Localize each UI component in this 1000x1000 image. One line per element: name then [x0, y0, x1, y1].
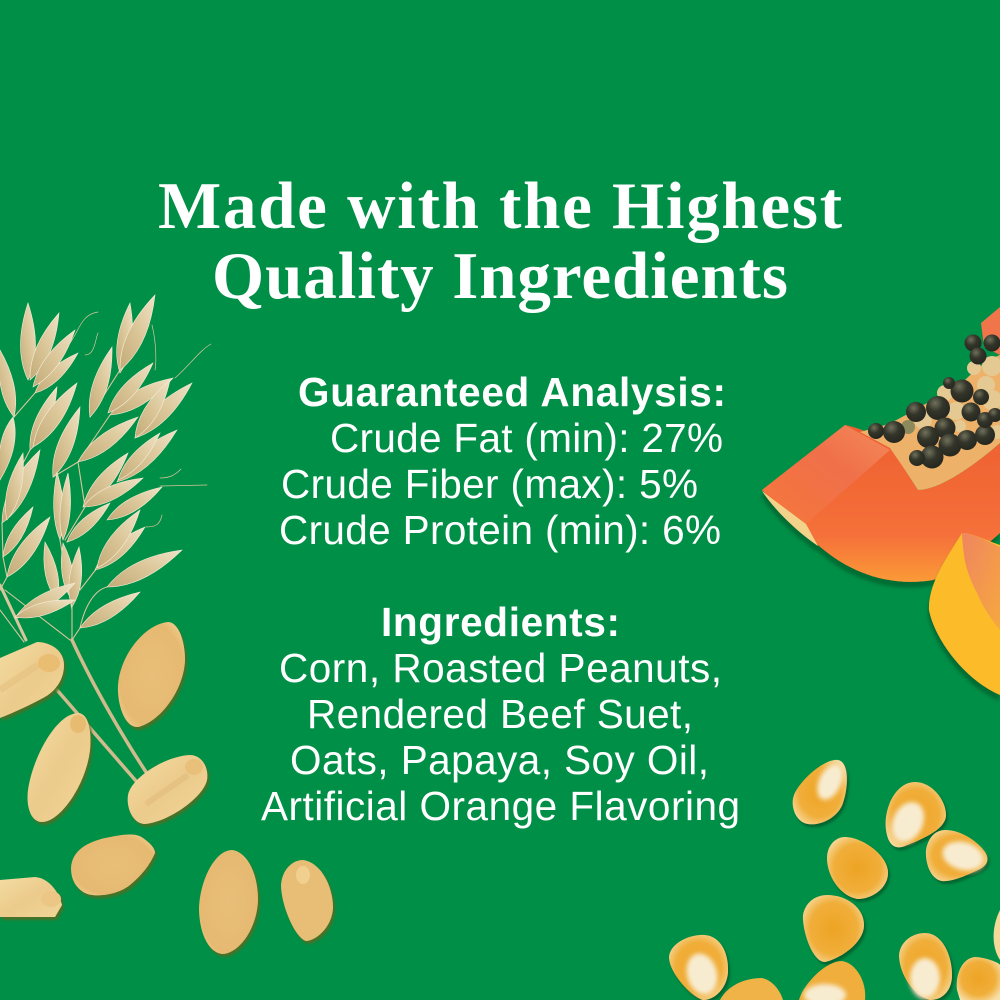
papaya yellow slice: [929, 533, 1000, 695]
kernel 4: [827, 837, 888, 899]
peanut: bottom centre: [199, 850, 258, 954]
papaya seeds: [868, 334, 1000, 468]
peanut: middle left: [28, 713, 90, 822]
text block: guaranteed analysis: [279, 369, 726, 553]
illustration: oat sprig: [0, 295, 211, 781]
kernel 8: [799, 961, 865, 1000]
papaya cavity pulp: [860, 355, 1000, 490]
kernel 1: [793, 760, 848, 824]
kernel 2: [886, 782, 946, 847]
kernel 6: [669, 935, 728, 1000]
peanut half: bottom left: [0, 877, 62, 917]
kernel 10: [957, 957, 1000, 1000]
kernel 9: [899, 933, 952, 1000]
text block: ingredients: Rendered Beef Suet,: [307, 691, 693, 737]
text block: ingredients: Corn, Roasted Peanuts,: [279, 645, 722, 691]
papaya wedge: [762, 425, 1000, 582]
title: Made with the Highest: [158, 169, 843, 243]
text block: guaranteed analysis: Crude Fat (min): 27%: [330, 415, 723, 461]
text block: guaranteed analysis: Crude Protein (min): 6%: [279, 507, 721, 553]
kernel 7: [720, 978, 783, 1000]
peanut half: left top: [0, 642, 64, 718]
kernel 3: [926, 830, 987, 881]
text block: guaranteed analysis: Crude Fiber (max): 5%: [281, 461, 698, 507]
text block: guaranteed analysis: Guaranteed Analysis:: [298, 369, 726, 415]
peanut half: middle right: [128, 755, 207, 824]
papaya top chunk: [981, 307, 1000, 355]
title: [158, 169, 843, 313]
text block: ingredients: Ingredients:: [381, 599, 620, 645]
title: Quality Ingredients: [212, 239, 788, 313]
text block: ingredients: Oats, Papaya, Soy Oil,: [290, 737, 709, 783]
peanut half: bottom right: [281, 860, 333, 941]
illustration: papaya: [762, 307, 1000, 695]
illustration: peanuts: [0, 622, 333, 954]
illustration: corn kernels: [669, 760, 1000, 1000]
text block: ingredients: [261, 599, 740, 829]
kernel 11: [994, 910, 1000, 960]
peanut: lower centre: [71, 835, 155, 895]
peanut: top centre: [118, 622, 185, 727]
text block: ingredients: Artificial Orange Flavoring: [261, 783, 740, 829]
kernel 5: [803, 895, 864, 962]
